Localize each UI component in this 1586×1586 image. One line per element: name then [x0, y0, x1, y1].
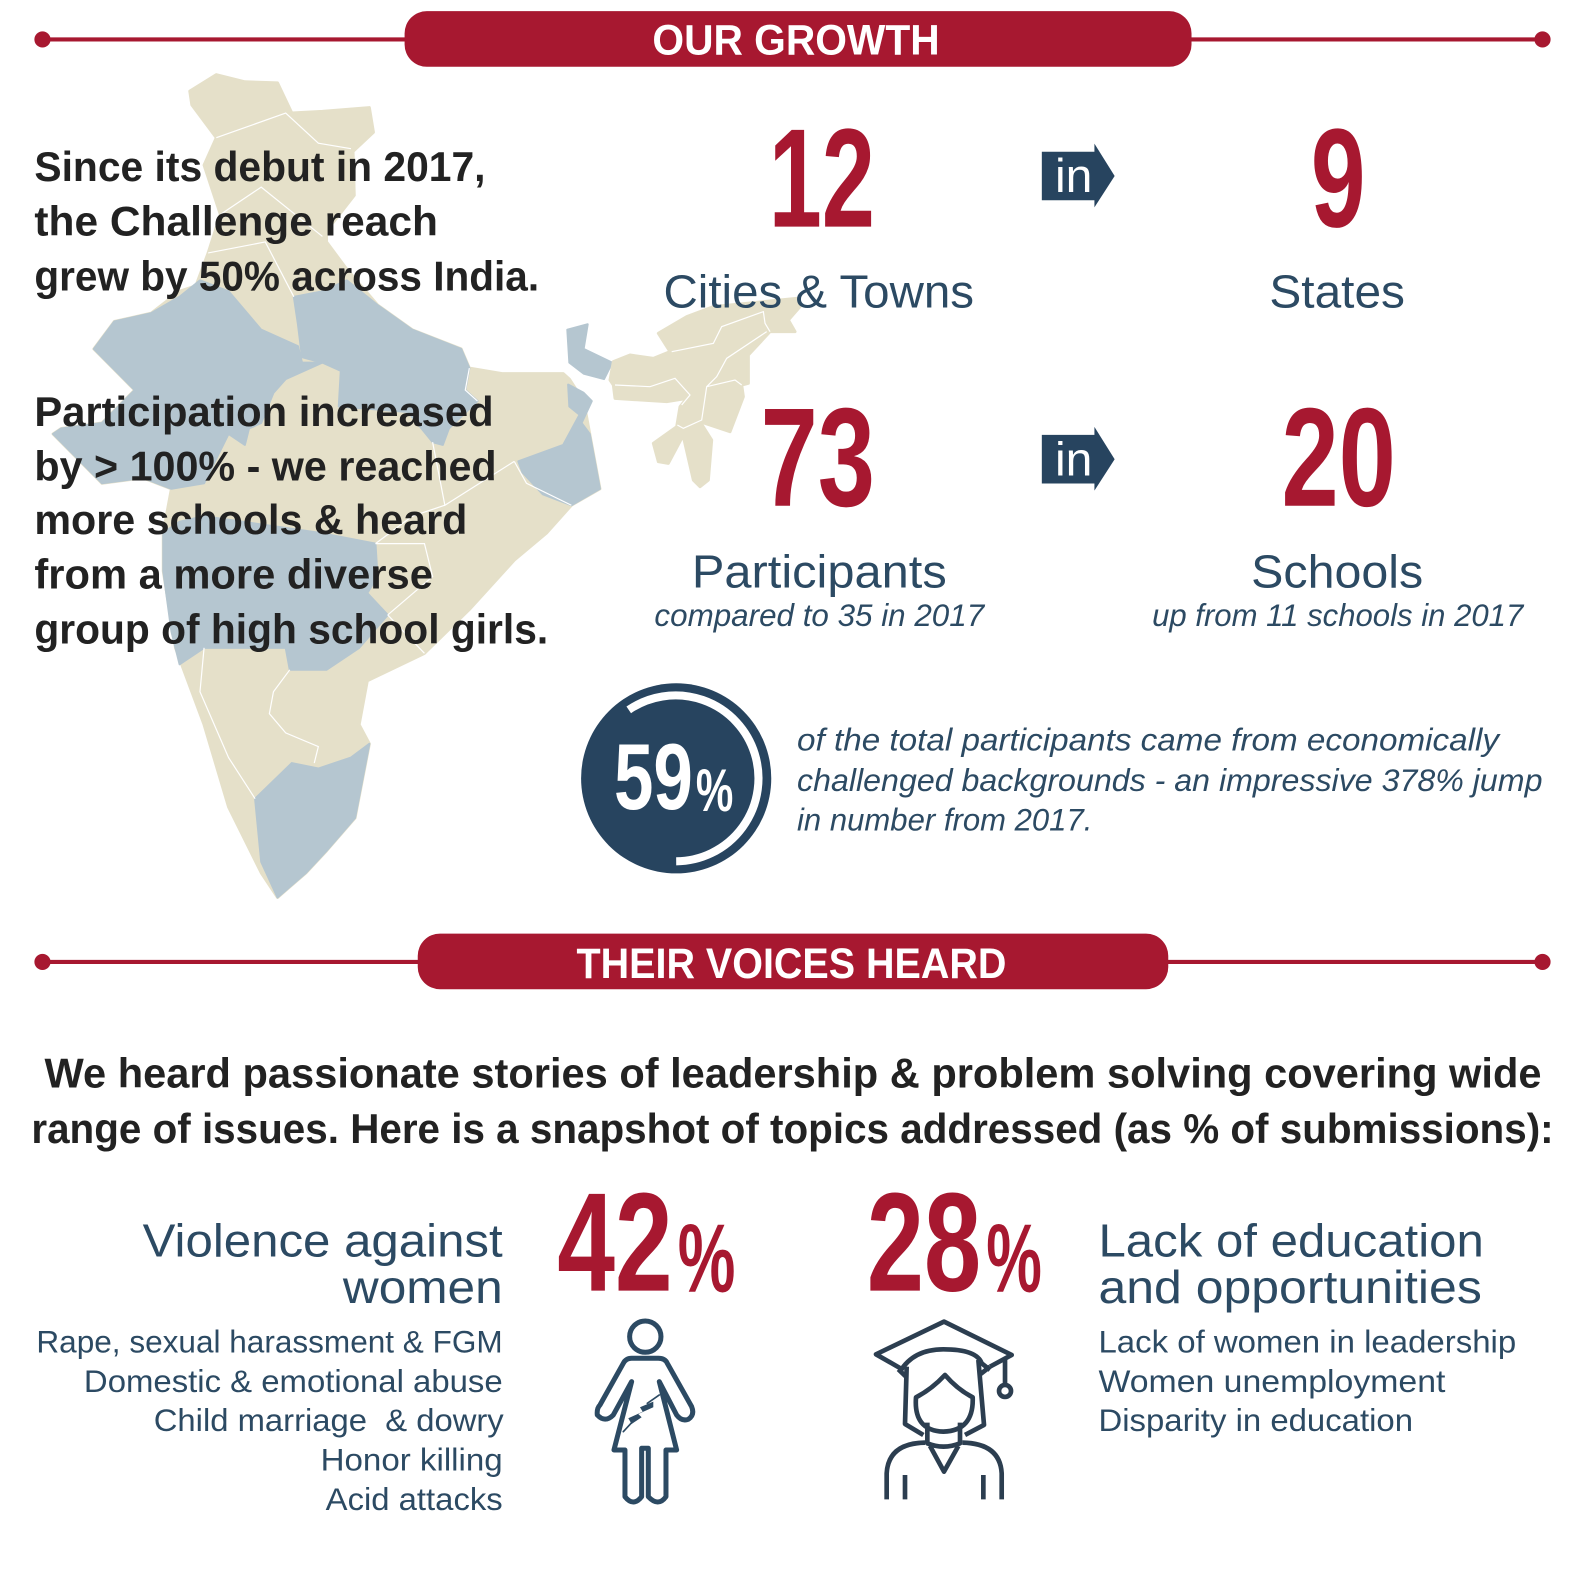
- intro text: participation: from a more diverse: [34, 551, 433, 598]
- icon: woman with lightning bolt: [597, 1321, 693, 1502]
- intro text: participation: more schools & heard: [34, 496, 467, 543]
- intro text: participation: [34, 388, 548, 652]
- topic: lack of education: Disparity in education: [1098, 1403, 1413, 1438]
- stat: 12 cities and towns: Cities & Towns: [664, 265, 974, 317]
- stat: 9 states: States: [1269, 265, 1405, 317]
- stat: 20 schools: 20: [1282, 379, 1396, 536]
- topic: lack of education: Lack of education: [1098, 1214, 1484, 1266]
- intro text: reach growth: Since its debut in 2017,: [34, 143, 486, 190]
- arrow: in (row one): in: [1055, 150, 1092, 203]
- text: economically challenged: of the total participants came from economically: [797, 723, 1501, 758]
- topic: violence against women: Child marriage & dowry: [154, 1403, 504, 1438]
- donut stat: 59 percent: [581, 683, 771, 873]
- intro paragraph: topics: range of issues. Here is a snapshot of topics addressed (as % of submissions):: [31, 1105, 1554, 1152]
- stat: 12 cities and towns: [664, 100, 974, 317]
- donut stat: 59 percent: %: [696, 756, 733, 824]
- topic: violence against women: Honor killing: [321, 1443, 503, 1478]
- topic: violence against women: Violence against: [143, 1214, 503, 1266]
- stat: 73 participants: 73: [761, 379, 875, 536]
- arrow: in (row one): [1042, 144, 1115, 207]
- topic: violence against women: [36, 1214, 504, 1517]
- section header: our growth: OUR GROWTH: [652, 18, 940, 65]
- stat: 12 cities and towns: 12: [769, 100, 875, 257]
- stat: 20 schools: Schools: [1251, 546, 1423, 598]
- topic: violence against women: women: [342, 1261, 503, 1313]
- intro text: participation: by > 100% - we reached: [34, 442, 497, 489]
- stat: 42 percent: %: [678, 1204, 735, 1313]
- arrow: in (row two): in: [1055, 433, 1092, 486]
- text: economically challenged: [797, 723, 1543, 837]
- intro text: participation: Participation increased: [34, 388, 494, 435]
- topic: violence against women: Domestic & emotional abuse: [84, 1364, 503, 1399]
- intro text: participation: group of high school girls.: [34, 605, 548, 652]
- stat: 73 participants: [654, 379, 986, 633]
- section header: their voices heard: [34, 934, 1551, 989]
- stat: 20 schools: [1152, 379, 1525, 633]
- topic: violence against women: Rape, sexual harassment & FGM: [36, 1324, 503, 1359]
- stat: 73 participants: compared to 35 in 2017: [654, 598, 986, 633]
- icon: graduate with cap: [876, 1322, 1012, 1499]
- intro text: reach growth: the Challenge reach: [34, 198, 438, 245]
- stat: 42 percent: 42: [557, 1164, 673, 1321]
- intro paragraph: topics: We heard passionate stories of leadership & problem solving covering wide: [45, 1049, 1541, 1096]
- text: economically challenged: in number from 2017.: [797, 802, 1092, 837]
- stat: 28 percent: %: [986, 1204, 1042, 1313]
- stat: 73 participants: Participants: [692, 546, 947, 598]
- intro text: reach growth: [34, 143, 539, 299]
- text: economically challenged: challenged backgrounds - an impressive 378% jump: [797, 763, 1543, 798]
- topic: violence against women: Acid attacks: [326, 1482, 503, 1517]
- map of India: [53, 75, 800, 897]
- intro paragraph: topics: [31, 1049, 1554, 1152]
- donut stat: 59 percent: 59: [614, 724, 693, 829]
- section header: our growth: [34, 11, 1551, 67]
- stat: 9 states: 9: [1311, 100, 1365, 257]
- arrow: in (row two): [1042, 427, 1115, 491]
- section header: their voices heard: THEIR VOICES HEARD: [577, 941, 1006, 988]
- stat: 20 schools: up from 11 schools in 2017: [1152, 598, 1525, 633]
- stat: 28 percent: 28: [867, 1164, 981, 1321]
- topic: lack of education: [1098, 1214, 1516, 1438]
- topic: lack of education: Women unemployment: [1098, 1364, 1446, 1399]
- intro text: reach growth: grew by 50% across India.: [34, 252, 539, 299]
- topic: lack of education: Lack of women in leadership: [1098, 1324, 1516, 1359]
- stat: 9 states: [1269, 100, 1405, 317]
- topic: lack of education: and opportunities: [1098, 1261, 1482, 1313]
